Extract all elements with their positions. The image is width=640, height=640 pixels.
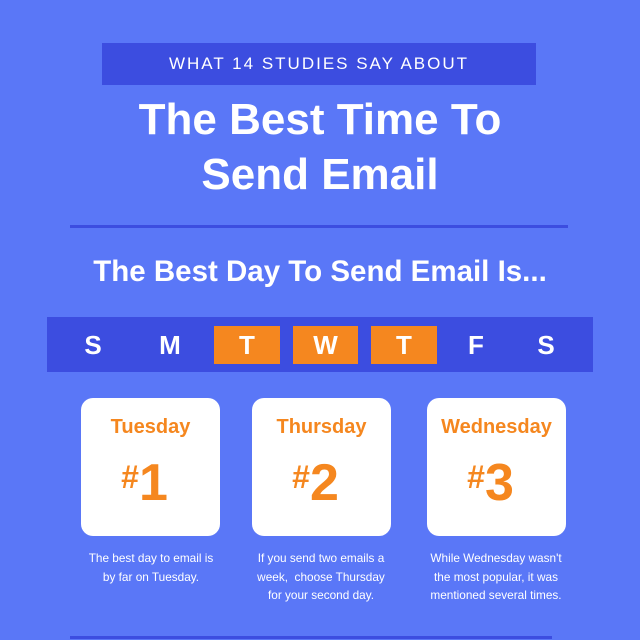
day bar: F: [468, 330, 484, 360]
day bar: M: [159, 330, 181, 360]
text: wednesday: While Wednesday wasn't: [430, 551, 562, 565]
title: Send Email: [201, 150, 439, 199]
text: tuesday: by far on Tuesday.: [103, 570, 199, 584]
banner: [102, 43, 536, 85]
card: wednesday: Wednesday: [441, 416, 552, 438]
subtitle: The Best Day To Send Email Is...: [93, 255, 547, 288]
card: thursday: #2: [292, 454, 339, 512]
card: wednesday: [427, 398, 566, 536]
text: thursday: [257, 551, 385, 602]
card: thursday: [252, 398, 391, 536]
day bar: W: [313, 330, 338, 360]
day bar: T: [396, 330, 412, 360]
text: wednesday: [430, 551, 562, 602]
card: tuesday: Tuesday: [111, 416, 190, 438]
text: thursday: week, choose Thursday: [257, 570, 385, 584]
day bar: S: [84, 330, 102, 360]
banner: WHAT 14 STUDIES SAY ABOUT: [169, 54, 469, 73]
text: wednesday: mentioned several times.: [430, 588, 562, 602]
card: thursday: Thursday: [276, 416, 367, 438]
day bar: [47, 317, 593, 372]
card: tuesday: [81, 398, 220, 536]
text: thursday: If you send two emails a: [258, 551, 384, 565]
title: The Best Time To: [139, 95, 501, 144]
title: [139, 95, 501, 199]
text: tuesday: The best day to email is: [89, 551, 213, 565]
text: tuesday: [89, 551, 213, 584]
card: wednesday: #3: [467, 454, 514, 512]
text: wednesday: the most popular, it was: [434, 570, 558, 584]
text: thursday: for your second day.: [268, 588, 374, 602]
card: tuesday: #1: [121, 454, 168, 512]
day bar: S: [537, 330, 555, 360]
day bar: T: [239, 330, 255, 360]
